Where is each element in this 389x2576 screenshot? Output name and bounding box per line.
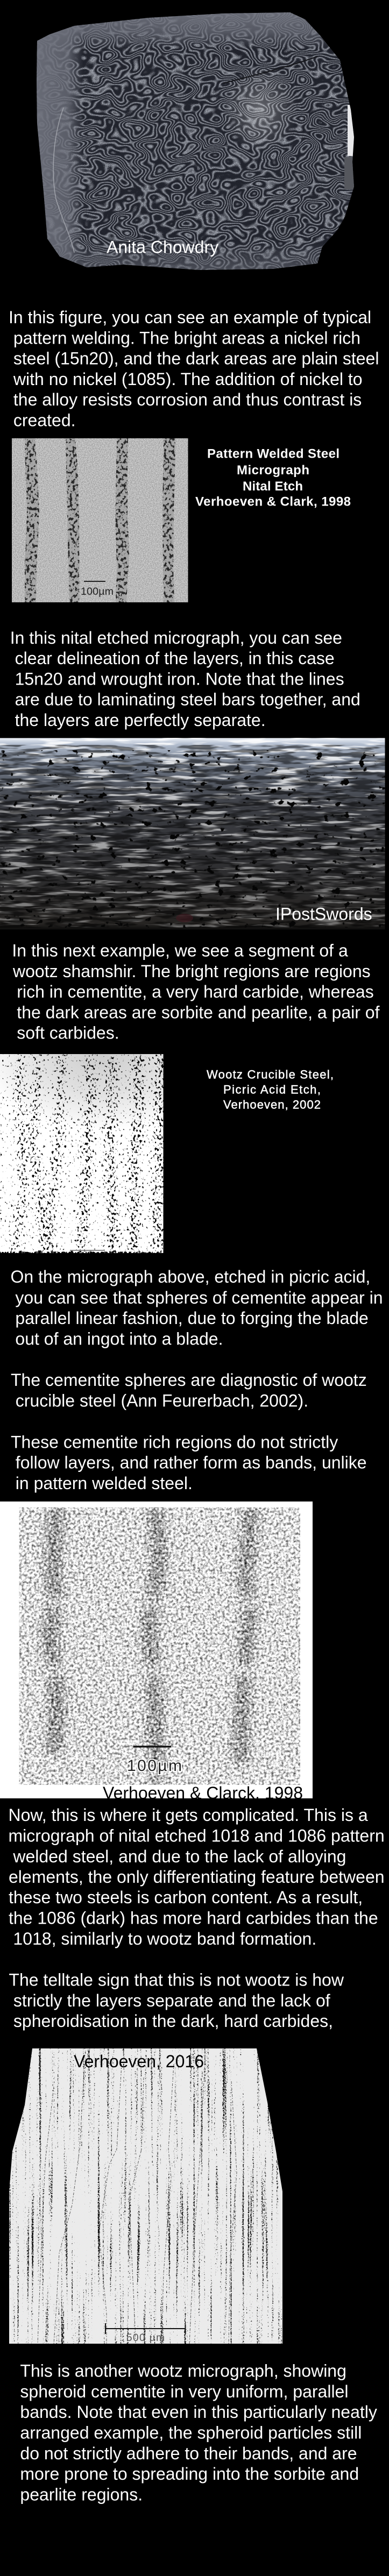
text block: picric acid micrograph explanation: in pattern welded steel. (16, 1474, 193, 1493)
text block: picric acid micrograph explanation: These cementite rich regions do not strictly (11, 1432, 338, 1451)
text block: wootz shamshir explanation: rich in cementite, a very hard carbide, whereas (17, 982, 374, 1001)
scale label: 100µm (127, 1757, 182, 1775)
text block: another wootz micrograph: do not strictly adhere to their bands, and are (20, 2444, 357, 2463)
text block: nital etched micrograph explanation: In this nital etched micrograph, you can see (10, 628, 342, 647)
photo: dark streaks (0, 745, 385, 928)
micrograph: long carbide lines (38, 2064, 237, 2344)
text block: another wootz micrograph: spheroid cementite in very uniform, parallel (20, 2382, 348, 2401)
text block: another wootz micrograph: This is another wootz micrograph, showing (20, 2361, 346, 2381)
white frame (0, 1502, 313, 1798)
text block: another wootz micrograph: more prone to spreading into the sorbite and (20, 2464, 359, 2484)
text block: wootz shamshir explanation: soft carbides. (17, 1023, 119, 1043)
caption: wootz crucible steel: Picric Acid Etch, (223, 1083, 321, 1097)
scale label: 100µm (81, 586, 114, 597)
scale bar (133, 1746, 171, 1748)
text block: typical pattern welding: the alloy resists corrosion and thus contrast is (13, 390, 362, 409)
credit: Anita Chowdry: Anita Chowdry (107, 237, 218, 257)
text block: this is where it gets complicated: strictly the layers separate and the lack of (13, 1991, 330, 2010)
text block: this is where it gets complicated: welded steel, and due to the lack of alloying (12, 1847, 346, 1866)
text block: this is where it gets complicated: elements, the only differentiating feature between (9, 1867, 385, 1887)
text block: picric acid micrograph explanation: The cementite spheres are diagnostic of wootz (11, 1370, 367, 1390)
text block: nital etched micrograph explanation: are due to laminating steel bars together, and (15, 690, 360, 709)
text block: picric acid micrograph explanation: crucible steel (Ann Feurerbach, 2002). (16, 1391, 308, 1410)
text block: typical pattern welding: with no nickel (1085). The addition of nickel to (13, 369, 363, 389)
text block: this is where it gets complicated: Now, this is where it gets complicated. This is a (9, 1805, 368, 1825)
text block: this is where it gets complicated (9, 1805, 385, 2031)
micrograph: grey haze at the top (0, 1054, 163, 1156)
text block: nital etched micrograph explanation: clear delineation of the layers, in this case (15, 649, 335, 668)
text block: this is where it gets complicated: these two steels is carbon content. As a result, (9, 1888, 363, 1907)
text block: typical pattern welding: pattern welding. The bright areas a nickel rich (13, 328, 360, 347)
caption: pattern welded steel micrograph: Verhoeven & Clark, 1998 (195, 495, 351, 509)
micrograph background (12, 438, 188, 602)
scale label: 500 µm (126, 2332, 165, 2344)
text block: picric acid micrograph explanation: you can see that spheres of cementite appear in (15, 1288, 383, 1307)
text block: this is where it gets complicated: micrograph of nital etched 1018 and 1086 pattern (9, 1826, 385, 1846)
photo: corrosion pits (0, 750, 385, 928)
micrograph: fine vertical bands (5, 2046, 285, 2345)
credit: Verhoeven 2016: Verhoeven, 2016 (74, 2052, 204, 2071)
photo: shamshir base tone (0, 738, 385, 930)
text block: this is where it gets complicated: the 1086 (dark) has more hard carbides than the (9, 1908, 378, 1927)
caption: wootz crucible steel: Wootz Crucible Steel, (207, 1068, 334, 1081)
credit: Verhoeven and Clarck: Verhoeven & Clarck, 1998 (103, 1783, 303, 1803)
micrograph: carbide bands (19, 1507, 300, 1785)
caption: pattern welded steel micrograph: Micrograph (237, 463, 309, 478)
text block: this is where it gets complicated: spheroidisation in the dark, hard carbides, (13, 2011, 333, 2031)
panel: wootz micrograph with spheroid bands (5, 2046, 285, 2345)
scale bar with end ticks (105, 2323, 186, 2334)
caption: pattern welded steel micrograph: Pattern Welded Steel (207, 447, 340, 461)
caption: pattern welded steel micrograph (195, 447, 351, 509)
text block: this is where it gets complicated: The telltale sign that this is not wootz is how (9, 1970, 344, 1989)
text block: nital etched micrograph explanation (10, 628, 360, 730)
scale bar (84, 581, 105, 582)
panel: nital etched 1018 and 1086 micrograph (0, 1502, 313, 1803)
caption: wootz crucible steel (207, 1068, 334, 1112)
panel: pattern welded blade photograph (32, 8, 360, 274)
photo: damascus blade surface (32, 8, 360, 274)
text block: picric acid micrograph explanation: On the micrograph above, etched in picric acid, (11, 1267, 370, 1286)
text block: wootz shamshir explanation (12, 941, 380, 1043)
text block: another wootz micrograph (20, 2361, 377, 2504)
text block: wootz shamshir explanation: the dark areas are sorbite and pearlite, a pair of (17, 1002, 380, 1022)
photo: bright streaks (0, 738, 385, 927)
text block: picric acid micrograph explanation (11, 1267, 383, 1493)
panel: picric acid etched wootz micrograph (0, 1054, 163, 1253)
dark layer bands (25, 438, 175, 602)
text block: typical pattern welding: created. (13, 410, 76, 430)
text block: another wootz micrograph: pearlite regions. (20, 2485, 143, 2504)
text block: another wootz micrograph: bands. Note that even in this particularly neatly (20, 2402, 377, 2422)
text block: typical pattern welding (9, 308, 379, 430)
scale bar (70, 1250, 105, 1251)
text block: typical pattern welding: In this figure, you can see an example of typical (9, 308, 371, 327)
text block: picric acid micrograph explanation: out of an ingot into a blade. (15, 1329, 223, 1349)
text block: typical pattern welding: steel (15n20), and the dark areas are plain steel (13, 349, 379, 368)
text block: picric acid micrograph explanation: parallel linear fashion, due to forging the blade (15, 1308, 369, 1328)
text block: this is where it gets complicated: 1018, similarly to wootz band formation. (13, 1929, 316, 1948)
micrograph: cementite sphere bands (0, 1054, 163, 1253)
panel: wootz shamshir photograph (0, 738, 385, 930)
caption: pattern welded steel micrograph: Nital Etch (243, 479, 303, 494)
text block: another wootz micrograph: arranged example, the spheroid particles still (20, 2423, 362, 2442)
caption: wootz crucible steel: Verhoeven, 2002 (223, 1098, 321, 1112)
text block: nital etched micrograph explanation: 15n20 and wrought iron. Note that the lines (15, 669, 344, 688)
text block: picric acid micrograph explanation: follow layers, and rather form as bands, unlike (16, 1453, 367, 1472)
credit: IPostSwords: IPostSwords (275, 905, 372, 924)
panel: nital etched pattern welded micrograph (12, 438, 188, 602)
scale label: 100 µm (74, 1237, 102, 1246)
text block: wootz shamshir explanation: In this next example, we see a segment of a (12, 941, 348, 960)
text block: nital etched micrograph explanation: the layers are perfectly separate. (15, 710, 266, 730)
text block: wootz shamshir explanation: wootz shamshir. The bright regions are regions (12, 962, 371, 981)
